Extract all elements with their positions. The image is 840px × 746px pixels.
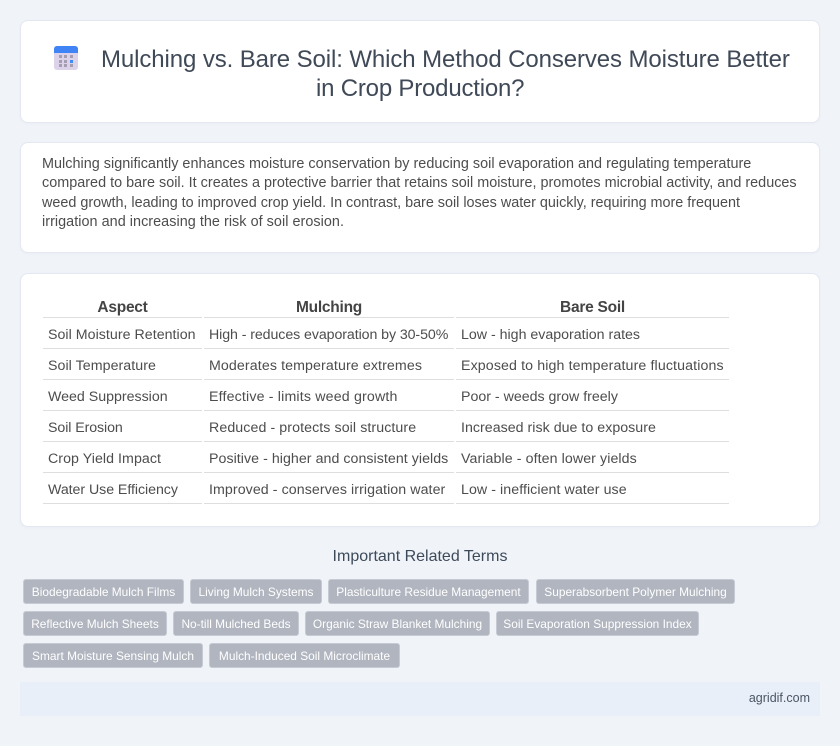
summary text (42, 156, 797, 230)
related term tags: Reflective Mulch Sheets (31, 617, 159, 631)
icon: calendar (54, 46, 78, 70)
comparison table: Mulching (296, 299, 362, 316)
header panel (20, 20, 820, 123)
comparison table: Soil Temperature (48, 358, 156, 374)
comparison table: Positive - higher and consistent yields (209, 451, 448, 467)
related term tags: Plasticulture Residue Management (336, 585, 521, 599)
summary text: compared to bare soil. It creates a protective barrier that retains soil moisture, promotes microbial activity, and reduces (42, 175, 797, 191)
related term tags: Biodegradable Mulch Films (32, 585, 175, 599)
related term tags: No-till Mulched Beds (181, 617, 291, 631)
heading: related terms: Important Related Terms (333, 548, 507, 565)
comparison table: Low - high evaporation rates (461, 327, 640, 343)
title: in Crop Production? (316, 75, 524, 102)
comparison table: Effective - limits weed growth (209, 389, 398, 405)
related term tags: Organic Straw Blanket Mulching (313, 617, 482, 631)
related term tags (23, 579, 735, 668)
comparison table: Crop Yield Impact (48, 451, 161, 467)
title (101, 46, 790, 102)
comparison table: Weed Suppression (48, 389, 168, 405)
comparison table: Aspect (97, 299, 148, 316)
related term tags: Smart Moisture Sensing Mulch (32, 649, 194, 663)
comparison table: Increased risk due to exposure (461, 420, 656, 436)
footer site name: agridif.com (749, 691, 810, 705)
comparison table: High - reduces evaporation by 30-50% (209, 327, 448, 343)
comparison table: Moderates temperature extremes (209, 358, 422, 374)
panel: summary (20, 142, 820, 253)
comparison table: Water Use Efficiency (48, 482, 178, 498)
comparison table: Soil Moisture Retention (48, 327, 196, 343)
summary text: weed growth, leading to improved crop yield. In contrast, bare soil loses water quickly, requiring more frequent (42, 195, 740, 211)
related term tags: Living Mulch Systems (198, 585, 313, 599)
related term tags: Mulch-Induced Soil Microclimate (219, 649, 390, 663)
related term tags: Superabsorbent Polymer Mulching (544, 585, 727, 599)
comparison table: Soil Erosion (48, 420, 123, 436)
comparison table: Bare Soil (560, 299, 625, 316)
title: Mulching vs. Bare Soil: Which Method Conserves Moisture Better (101, 46, 790, 73)
comparison table (43, 299, 729, 504)
footer bar (20, 682, 820, 716)
comparison table: Improved - conserves irrigation water (209, 482, 445, 498)
summary text: irrigation and increasing the risk of soil erosion. (42, 214, 344, 230)
comparison table: Poor - weeds grow freely (461, 389, 618, 405)
comparison table: Reduced - protects soil structure (209, 420, 416, 436)
summary text: Mulching significantly enhances moisture conservation by reducing soil evaporation and regulating temperature (42, 156, 751, 172)
comparison table: Exposed to high temperature fluctuations (461, 358, 724, 374)
comparison table: Variable - often lower yields (461, 451, 637, 467)
comparison table: Low - inefficient water use (461, 482, 627, 498)
panel: comparison table (20, 273, 820, 527)
related term tags: Soil Evaporation Suppression Index (503, 617, 692, 631)
